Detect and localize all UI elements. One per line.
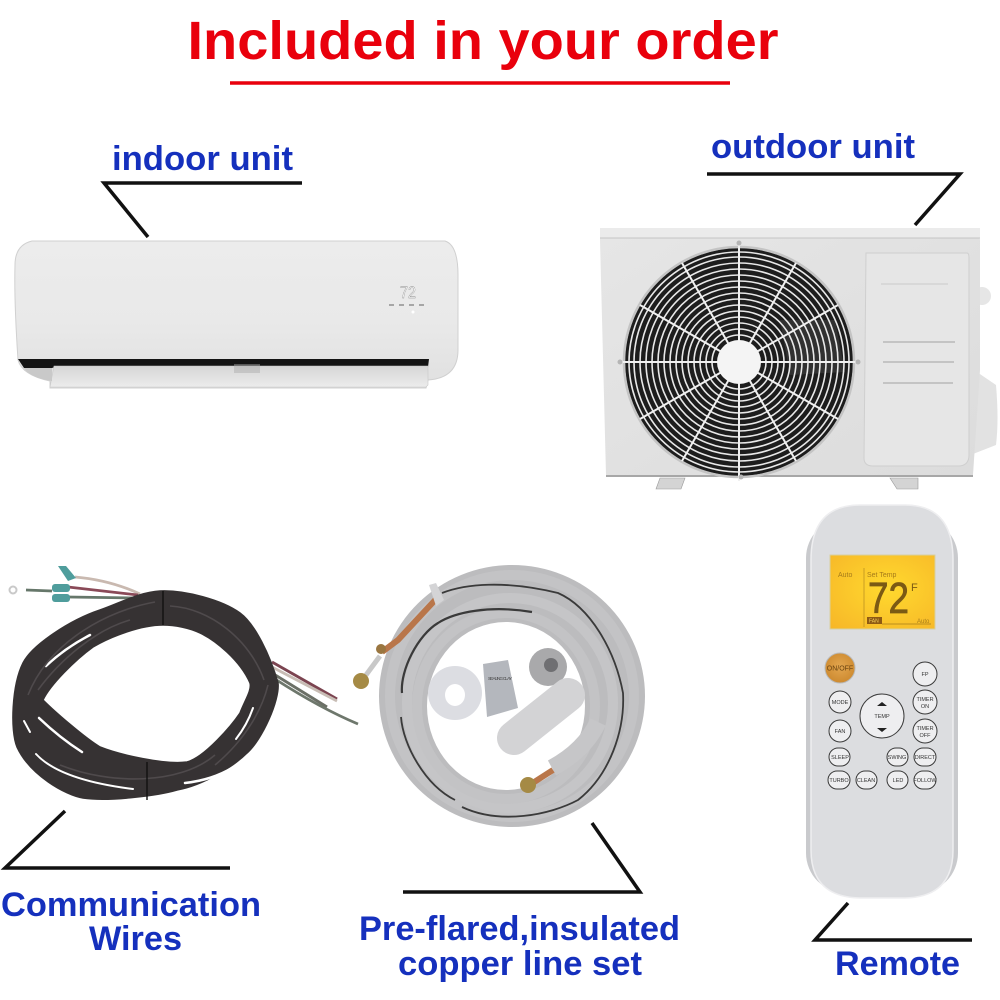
remote button labels: FP — [921, 672, 929, 678]
ON/OFF button: ON/OFF — [827, 666, 853, 672]
label: remote — [815, 903, 972, 983]
label: remote: Remote — [835, 945, 960, 983]
label: line set — [359, 823, 680, 983]
remote button labels: TURBO — [829, 778, 849, 784]
indoor unit — [15, 241, 458, 388]
label: communication wires: Wires — [89, 920, 182, 958]
remote button labels: CLEAN — [857, 778, 875, 784]
remote button labels: FAN — [835, 729, 845, 735]
indoor display: 72 — [400, 283, 416, 302]
cable bundle — [13, 591, 278, 799]
LCD screen: Auto — [838, 572, 853, 579]
LCD screen: F — [911, 582, 918, 594]
LCD screen: 72 — [868, 574, 909, 623]
label: communication wires — [1, 811, 261, 958]
label: communication wires: Communication — [1, 886, 261, 924]
remote buttons — [828, 662, 937, 789]
cabinet — [600, 228, 980, 475]
title underline — [230, 81, 730, 85]
label: outdoor unit — [707, 128, 960, 225]
remote — [806, 505, 958, 898]
sealant packet: SEALING CLAY — [488, 676, 512, 681]
fan grille — [618, 240, 860, 481]
remote button labels: LED — [893, 778, 903, 784]
label: indoor unit: indoor unit — [112, 140, 293, 178]
remote button labels: FOLLOW — [913, 778, 937, 784]
remote button labels: MODE — [832, 700, 849, 706]
foam sleeve — [514, 695, 568, 738]
remote button labels: OFF — [920, 733, 931, 739]
coil highlights — [390, 575, 634, 817]
LCD screen: FAN — [869, 618, 879, 624]
valve cover — [973, 370, 998, 454]
remote button labels: SWING — [888, 755, 906, 761]
label: line set: copper line set — [398, 945, 642, 983]
label: line set: Pre-flared,insulated — [359, 910, 680, 948]
insulated coil — [379, 565, 645, 827]
sealant packet — [483, 660, 518, 717]
remote button labels — [829, 672, 937, 784]
cable highlights — [28, 602, 268, 779]
remote button labels: DIRECT — [915, 755, 936, 761]
coil separators — [401, 585, 623, 817]
outdoor unit — [600, 228, 998, 489]
temperature arrows — [877, 702, 887, 732]
LCD screen — [830, 555, 935, 629]
copper line set — [353, 565, 645, 827]
LCD screen: Set Temp — [867, 572, 897, 579]
remote button labels: SLEEP — [831, 755, 849, 761]
inner tube end — [552, 722, 598, 768]
label: outdoor unit: outdoor unit — [711, 128, 915, 166]
cable slits — [24, 635, 253, 789]
remote button labels: ON — [921, 704, 929, 710]
title: Included in your order — [188, 11, 778, 71]
communication wires — [10, 566, 358, 800]
label: indoor unit — [104, 140, 302, 237]
wire strands and terminals — [26, 577, 358, 724]
remote button labels: TIMER — [916, 726, 934, 732]
foam ring — [428, 666, 482, 720]
remote button labels: TIMER — [916, 697, 934, 703]
remote button labels: TEMP — [874, 714, 890, 720]
foam plug — [529, 648, 567, 686]
service panel — [864, 253, 969, 466]
ON/OFF button — [825, 653, 855, 683]
LCD screen: Auto — [917, 619, 930, 625]
copper tube and flare nut — [382, 598, 437, 652]
feet — [656, 478, 685, 489]
